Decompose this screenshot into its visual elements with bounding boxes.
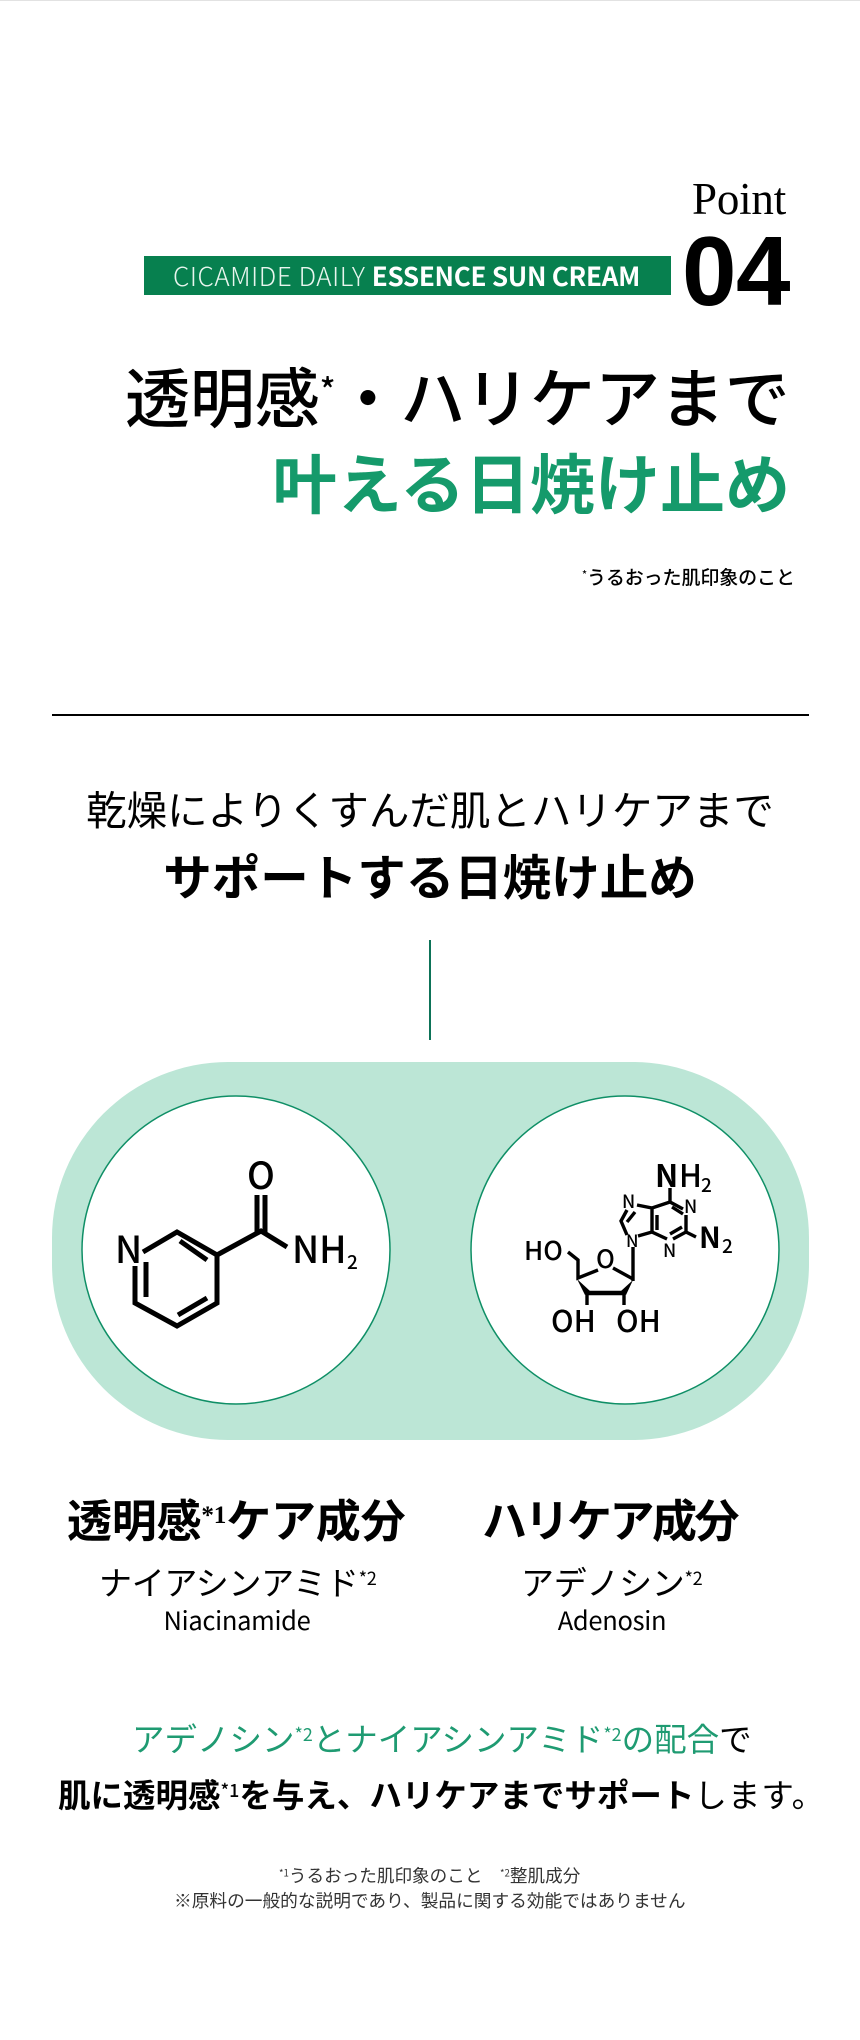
icon: adenosine molecule: H: [679, 1151, 702, 1196]
ingredient 2 name: アデノシン*2: [521, 1557, 702, 1605]
product name text: CICAMIDE DAILY ESSENCE SUN CREAM: [173, 257, 640, 294]
summary line 1: アデノシン*2とナイアシンアミド*2の配合で: [132, 1714, 752, 1761]
top hairline: [0, 0, 860, 1]
icon: niacinamide molecule: NH: [292, 1220, 347, 1274]
icon: adenosine molecule: OH: [551, 1297, 596, 1341]
icon: adenosine molecule: HO: [524, 1231, 563, 1268]
ingredient pill panel: [52, 1062, 809, 1440]
icon: adenosine molecule: N: [655, 1151, 678, 1196]
icon: niacinamide molecule: 2: [347, 1248, 358, 1275]
title footnote: *うるおった肌印象のこと: [582, 563, 795, 590]
icon: adenosine molecule: 2: [722, 1232, 733, 1259]
icon: adenosine molecule: N: [699, 1215, 721, 1257]
footnote line 2: ※原料の一般的な説明であり、製品に関する効能ではありません: [174, 1887, 686, 1913]
ingredient 1 name: ナイアシンアミド*2: [99, 1557, 377, 1605]
icon: adenosine molecule: 2: [701, 1171, 712, 1198]
ingredient 2 latin name: Adenosin: [558, 1601, 666, 1638]
icon: adenosine molecule: N: [622, 1188, 635, 1214]
icon: niacinamide molecule: N: [115, 1220, 142, 1274]
title line 2: 叶える日焼け止め: [272, 433, 790, 527]
icon: adenosine molecule: OH: [616, 1297, 661, 1341]
summary line 2: 肌に透明感*1を与え、ハリケアまでサポートします。: [58, 1770, 825, 1817]
ingredient 1 heading: 透明感*1ケア成分: [67, 1485, 405, 1550]
connector line: [429, 940, 431, 1040]
ingredient 2 heading: ハリケア成分: [482, 1485, 737, 1550]
footnote line 1: *1うるおった肌印象のこと *2整肌成分: [279, 1863, 580, 1888]
icon: niacinamide molecule: O: [247, 1146, 275, 1200]
subheading line 1: 乾燥によりくすんだ肌とハリケアまで: [86, 778, 774, 837]
title line 1: 透明感*・ハリケアまで: [125, 347, 790, 441]
icon: adenosine molecule: N: [626, 1227, 638, 1252]
subheading line 2: サポートする日焼け止め: [163, 839, 697, 909]
divider: [52, 714, 809, 716]
label: Point: Point: [692, 174, 786, 224]
icon: niacinamide molecule: [81, 1095, 391, 1405]
icon: adenosine molecule: O: [596, 1240, 615, 1276]
number 04: 04: [682, 216, 790, 326]
product name bar: [144, 256, 671, 295]
icon: adenosine molecule: [470, 1095, 780, 1405]
icon: adenosine molecule: N: [684, 1193, 697, 1219]
ingredient 1 latin name: Niacinamide: [164, 1601, 310, 1638]
icon: adenosine molecule: N: [663, 1237, 676, 1263]
